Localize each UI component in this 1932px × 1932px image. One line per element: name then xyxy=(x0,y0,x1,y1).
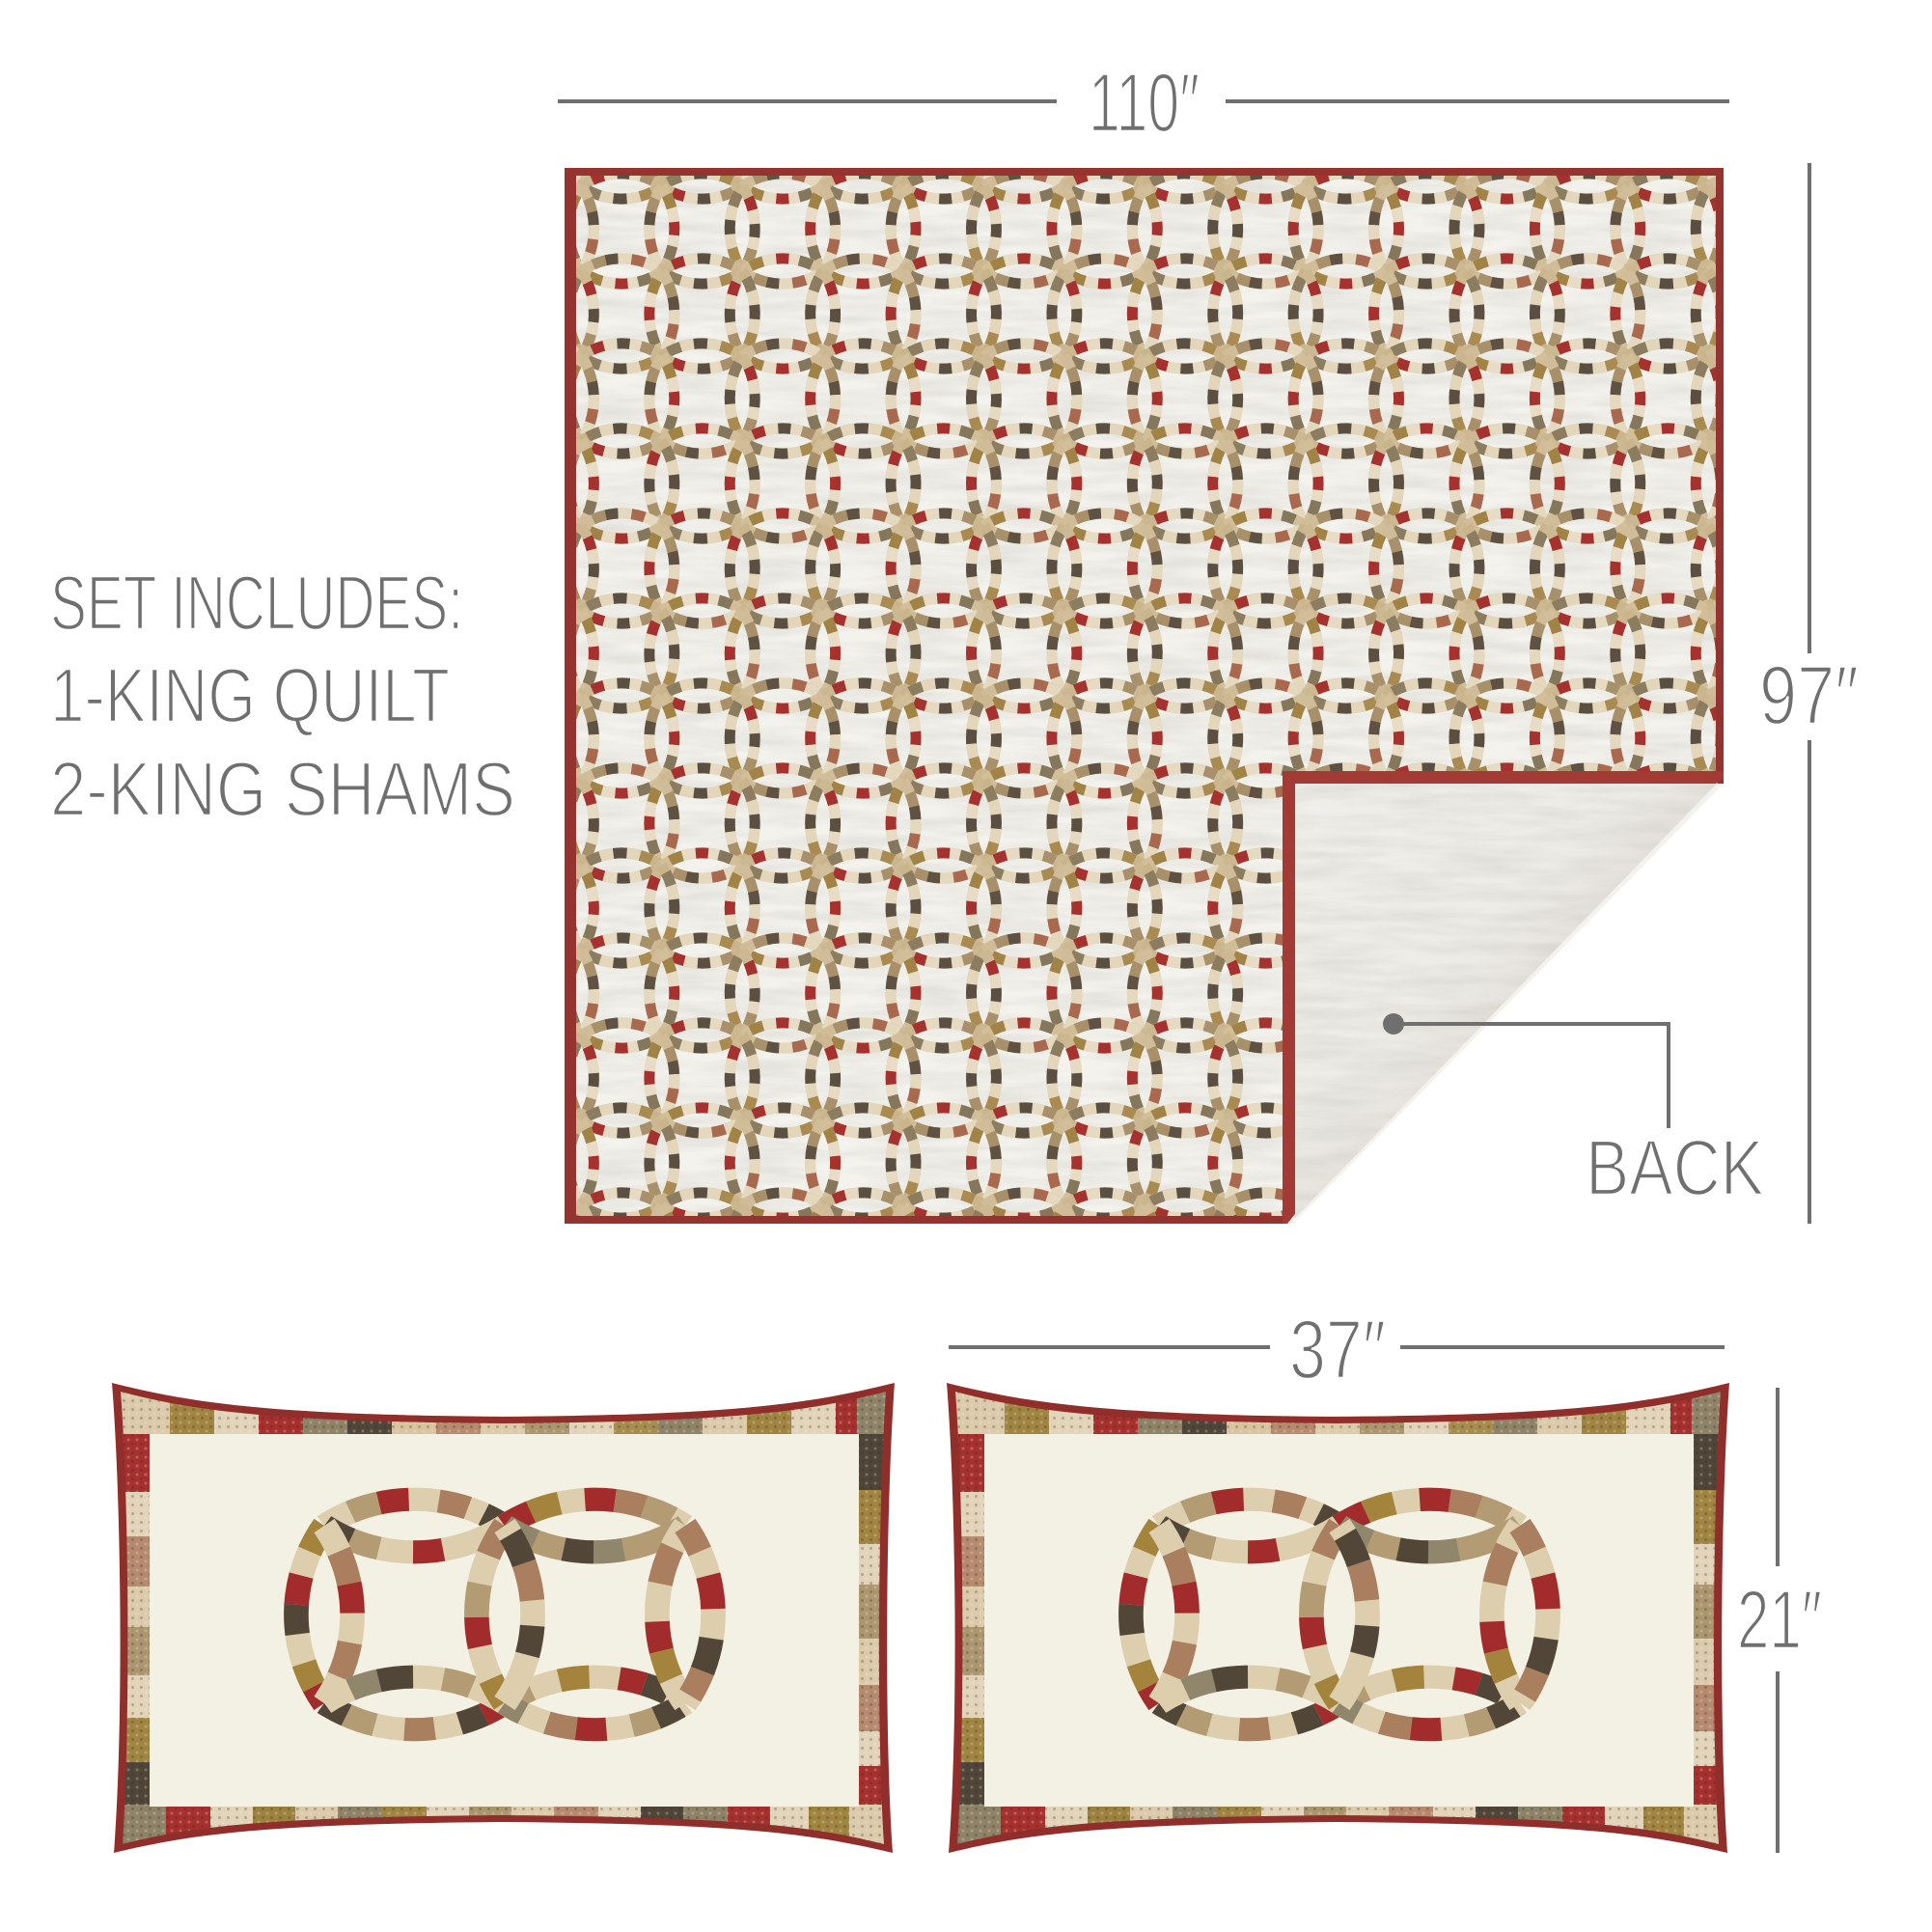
quilt binding xyxy=(565,168,1724,1224)
label: 97 inches: 97″ xyxy=(1759,649,1859,742)
sham binding xyxy=(112,1383,895,1853)
quilt front fabric xyxy=(565,168,1724,1224)
label: 21 inches: 21″ xyxy=(1737,1574,1822,1667)
text block: set includes xyxy=(50,560,515,832)
sham centre panel xyxy=(150,1434,859,1807)
panel: left pillow sham xyxy=(112,1383,896,1854)
panel: king quilt xyxy=(565,168,1724,1224)
callout: back of quilt xyxy=(1383,1013,1764,1212)
line: set includes: SET INCLUDES: xyxy=(50,560,463,646)
label: 37 inches: 37″ xyxy=(1289,1304,1386,1396)
double wedding ring pattern xyxy=(488,89,1932,1290)
callout leader line and dot xyxy=(1383,1013,1669,1128)
line: 2 king shams: 2-KING SHAMS xyxy=(50,746,515,832)
patchwork border xyxy=(112,1383,896,1854)
label: 110 inches: 110″ xyxy=(1089,57,1200,150)
folded quilt back xyxy=(1295,783,1718,1218)
label: back: BACK xyxy=(1586,1124,1764,1212)
panel: right pillow sham xyxy=(947,1383,1730,1854)
fold binding xyxy=(1283,771,1724,1224)
interlocked wedding rings xyxy=(296,1500,713,1729)
line: 1 king quilt: 1-KING QUILT xyxy=(50,652,450,738)
